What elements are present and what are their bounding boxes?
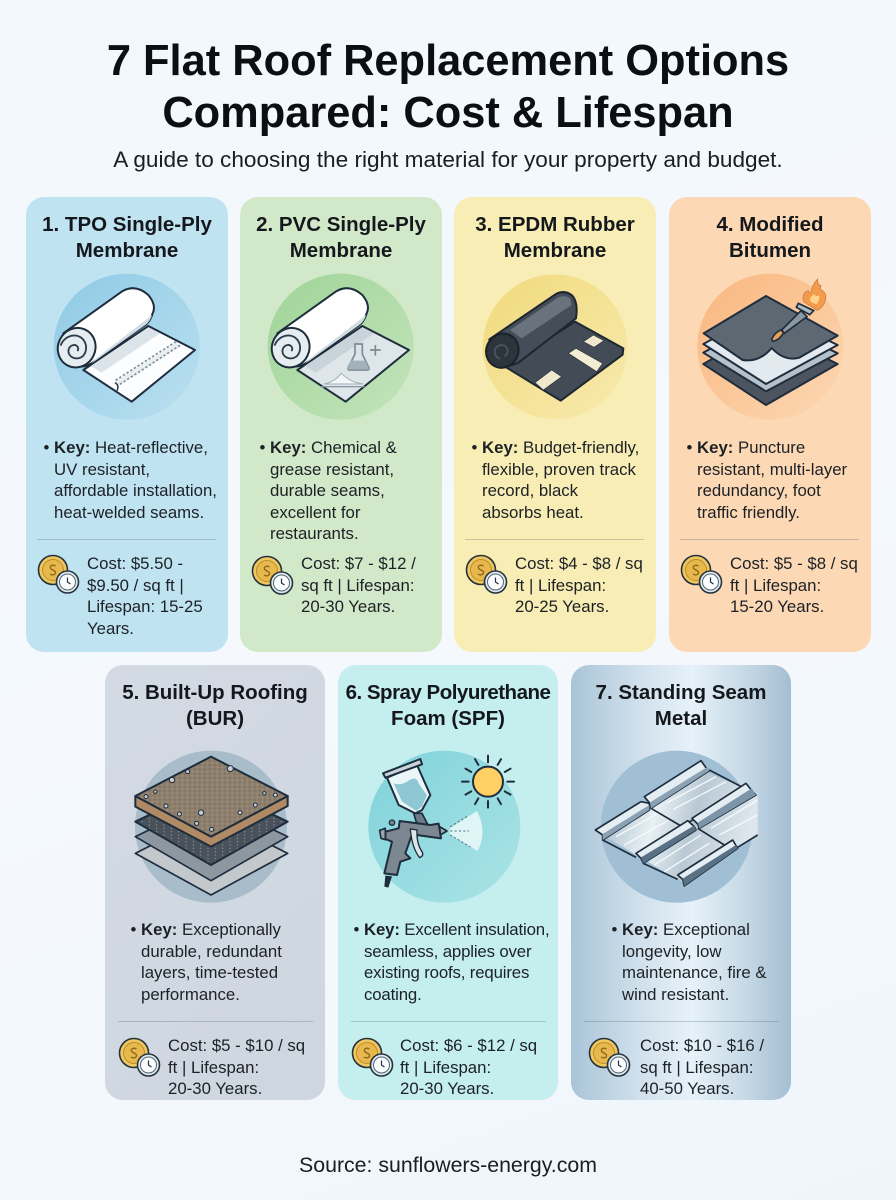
text: key features: Key: Excellent insulation, (364, 920, 549, 939)
text: cost and lifespan: Lifespan: 15-25 (87, 597, 203, 616)
text: key features: Key: Budget-friendly, (482, 438, 639, 457)
text: key features: performance. (141, 985, 240, 1004)
text: key features: layers, time-tested (141, 963, 278, 982)
text: key features: durable seams, (270, 481, 385, 500)
heading: EPDM (475, 213, 635, 262)
text: key features: record, black (482, 481, 578, 500)
text: key features: Key: Heat-reflective, (54, 438, 208, 457)
text: cost and lifespan (87, 554, 203, 638)
text: cost and lifespan (168, 1036, 305, 1098)
text: cost and lifespan: Years. (87, 619, 134, 638)
text: cost and lifespan: ft | Lifespan: (515, 576, 606, 595)
panel: PVC single-ply membrane: • (260, 438, 265, 457)
text: key features (260, 438, 397, 543)
panel: built-up roofing: • (130, 920, 136, 939)
text: cost and lifespan: Cost: $5.50 - (87, 554, 183, 573)
icon: coin and clock (38, 554, 80, 594)
panel: EPDM rubber membrane (454, 197, 656, 652)
text: key features: Key: Exceptional (622, 920, 750, 939)
text: key features: coating. (364, 985, 422, 1004)
text: key features (472, 438, 639, 522)
icon: coin and clock (252, 556, 294, 595)
text: key features: restaurants. (270, 524, 359, 543)
text: cost and lifespan: 20-30 Years. (400, 1079, 494, 1098)
icon: gravel-topped roofing layers (134, 750, 289, 903)
text: cost and lifespan: ft | Lifespan: (400, 1058, 491, 1077)
heading: PVC (256, 213, 426, 262)
text: key features (44, 438, 217, 522)
text: key features: Key: Puncture (697, 438, 805, 457)
text: key features: longevity, low (622, 942, 722, 961)
text: key features: redundancy, foot (697, 481, 821, 500)
panel: TPO single-ply membrane: • (44, 438, 49, 457)
icon: spray gun and sun (368, 750, 520, 903)
text: cost and lifespan: 15-20 Years. (730, 597, 824, 616)
text: key features: Key: Chemical & (270, 438, 397, 457)
text: cost and lifespan (730, 554, 858, 616)
text: cost and lifespan: Cost: $7 - $12 / (301, 554, 416, 573)
heading: modified bitumen (716, 213, 824, 262)
text: key features: excellent for (270, 503, 360, 522)
title (107, 37, 789, 137)
text: key features: maintenance, fire & (622, 963, 767, 982)
text: key features: heat-welded seams. (54, 503, 204, 522)
text: key features: existing roofs, requires (364, 963, 529, 982)
heading: TPO: Membrane (76, 239, 178, 262)
heading: SPF: Foam (SPF) (391, 707, 505, 730)
text: key features: resistant, multi-layer (697, 460, 847, 479)
panel: TPO single-ply membrane (26, 197, 228, 652)
heading: SPF (346, 681, 550, 730)
text: key features (354, 920, 549, 1004)
panel: spray polyurethane foam: • (354, 920, 359, 939)
text: key features: durable, redundant (141, 942, 282, 961)
heading: standing seam metal: Metal (655, 707, 707, 730)
heading: modified bitumen: 4. Modified (716, 213, 824, 236)
icon: coin and clock (466, 554, 508, 594)
text: cost and lifespan: 20-25 Years. (515, 597, 609, 616)
text: key features: Key: Exceptionally (141, 920, 281, 939)
text: key features: traffic friendly. (697, 503, 800, 522)
source line: Source: sunflowers-energy.com (299, 1153, 597, 1177)
panel: standing seam metal: • (612, 920, 617, 939)
text: cost and lifespan: 20-30 Years. (301, 597, 395, 616)
text: key features (686, 438, 847, 522)
text: cost and lifespan: ft | Lifespan: (168, 1058, 259, 1077)
text: cost and lifespan (640, 1036, 764, 1098)
text: cost and lifespan (515, 554, 643, 616)
text: cost and lifespan: Cost: $5 - $10 / sq (168, 1036, 305, 1055)
text: key features: flexible, proven track (482, 460, 636, 479)
text: key features: grease resistant, (270, 460, 394, 479)
icon: coin and clock (352, 1038, 394, 1077)
text: key features (612, 920, 767, 1004)
heading: standing seam metal (596, 681, 766, 730)
text: key features: wind resistant. (622, 985, 729, 1004)
text: cost and lifespan: $9.50 / sq ft | (87, 576, 184, 595)
panel: spray polyurethane foam (338, 665, 558, 1100)
text: cost and lifespan: ft | Lifespan: (730, 576, 821, 595)
heading: EPDM: 3. EPDM Rubber (475, 213, 635, 236)
icon: coin and clock (118, 1038, 160, 1077)
heading: PVC: Membrane (290, 239, 392, 262)
panel: built-up roofing (105, 665, 325, 1100)
heading: standing seam metal: 7. Standing Seam (596, 681, 766, 704)
heading: SPF: 6. Spray Polyurethane (346, 681, 550, 704)
icon: white membrane roll with seam (54, 274, 200, 420)
text: cost and lifespan (301, 554, 416, 616)
heading: TPO (42, 213, 212, 262)
panel: standing seam metal (571, 665, 791, 1100)
icon: coin and clock (588, 1038, 630, 1077)
text: cost and lifespan: Cost: $6 - $12 / sq (400, 1036, 537, 1055)
subtitle: A guide to choosing the right material for your property and budget. (113, 147, 783, 172)
panel: EPDM rubber membrane: • (472, 438, 477, 457)
text: cost and lifespan (400, 1036, 537, 1098)
icon: PVC roll with flask (268, 274, 414, 420)
heading: EPDM: Membrane (504, 239, 606, 262)
text: key features: UV resistant, (54, 460, 150, 479)
text: cost and lifespan: 20-30 Years. (168, 1079, 262, 1098)
icon: coin and clock (680, 554, 722, 594)
panel: PVC single-ply membrane (240, 197, 442, 652)
heading: PVC: 2. PVC Single-Ply (256, 213, 426, 236)
text: key features: absorbs heat. (482, 503, 584, 522)
title: 7 Flat Roof Replacement Options (107, 37, 789, 85)
text: key features: seamless, applies over (364, 942, 531, 961)
text: cost and lifespan: Cost: $5 - $8 / sq (730, 554, 858, 573)
text: cost and lifespan: Cost: $10 - $16 / (640, 1036, 764, 1055)
text: cost and lifespan: Cost: $4 - $8 / sq (515, 554, 643, 573)
text: cost and lifespan: sq ft | Lifespan: (301, 576, 415, 595)
heading: modified bitumen: Bitumen (729, 239, 811, 262)
text: cost and lifespan: sq ft | Lifespan: (640, 1058, 754, 1077)
text: key features: affordable installation, (54, 481, 217, 500)
text: key features (130, 920, 282, 1004)
icon: black rubber roll with patches (482, 274, 628, 419)
title: Compared: Cost & Lifespan (162, 89, 734, 137)
icon: layered bitumen sheets with torch (697, 274, 844, 420)
icon: metal roof panels (594, 750, 758, 903)
panel: modified bitumen: • (686, 438, 692, 457)
heading: TPO: 1. TPO Single-Ply (42, 213, 212, 236)
panel: modified bitumen (669, 197, 871, 652)
heading: BUR (122, 681, 308, 730)
text: cost and lifespan: 40-50 Years. (640, 1079, 734, 1098)
heading: BUR: (BUR) (186, 707, 244, 730)
heading: BUR: 5. Built-Up Roofing (122, 681, 308, 704)
